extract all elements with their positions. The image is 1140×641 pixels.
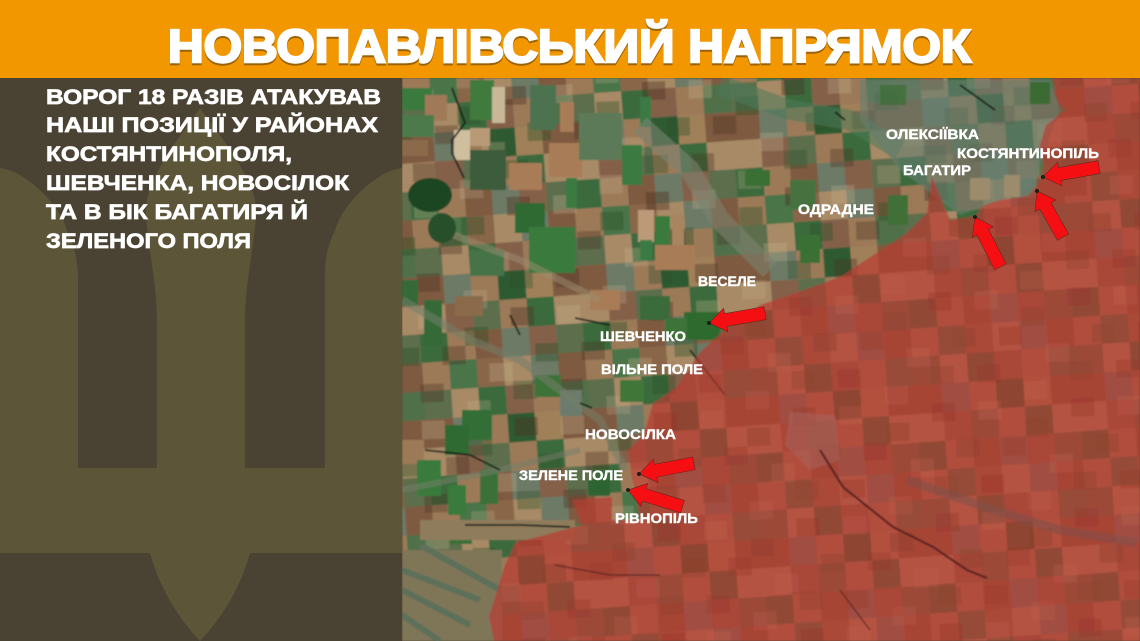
settlement labels: ШЕВЧЕНКО bbox=[600, 328, 686, 344]
map fields base bbox=[402, 78, 1140, 641]
arrow: Kostiantynopil east bbox=[1039, 155, 1101, 189]
settlement labels: ЗЕЛЕНЕ ПОЛЕ bbox=[519, 467, 623, 483]
settlement labels: НОВОСІЛКА bbox=[585, 426, 676, 442]
arrow: Bahatyr bbox=[963, 210, 1011, 272]
panel text: attack summary: ТА В БІК БАГАТИРЯ Й bbox=[46, 199, 308, 224]
trident left prong bbox=[0, 168, 78, 468]
arrow: Kostiantynopil south bbox=[1026, 183, 1074, 243]
trident right prong bbox=[325, 168, 402, 468]
creeks bbox=[425, 85, 995, 527]
panel text: attack summary: КОСТЯНТИНОПОЛЯ, bbox=[46, 142, 292, 166]
settlement labels: БАГАТИР bbox=[903, 162, 971, 178]
settlement labels: ОДРАДНЕ bbox=[798, 201, 874, 217]
panel text: attack summary: НАШІ ПОЗИЦІЇ У РАЙОНАХ bbox=[46, 112, 379, 137]
town and valleys inside red zone bbox=[555, 412, 1137, 630]
trident base band and point bbox=[0, 468, 402, 641]
panel text: attack summary: ВОРОГ 18 РАЗІВ АТАКУВАВ bbox=[46, 85, 381, 109]
map fields texture bbox=[402, 78, 1140, 641]
arrow: Shevchenko bbox=[705, 301, 767, 335]
settlement labels: КОСТЯНТИНОПІЛЬ bbox=[957, 145, 1099, 161]
trident centre prong bbox=[146, 108, 256, 468]
arrow: Zelene Pole bbox=[635, 452, 696, 486]
arrow: Rivnopil bbox=[623, 478, 686, 518]
trident emblem bbox=[0, 108, 402, 641]
settlement labels: ОЛЕКСІЇВКА bbox=[886, 126, 979, 142]
left panel background bbox=[0, 78, 402, 641]
header bar bbox=[0, 0, 1140, 78]
settlement labels bbox=[519, 126, 1099, 526]
settlement labels: РІВНОПІЛЬ bbox=[615, 510, 698, 526]
panel text: attack summary bbox=[46, 85, 381, 253]
red occupied zone bbox=[489, 78, 1140, 641]
panel text: attack summary: ЗЕЛЕНОГО ПОЛЯ bbox=[46, 229, 251, 253]
panel text: attack summary: ШЕВЧЕНКА, НОВОСІЛОК bbox=[46, 171, 350, 195]
satellite map bbox=[402, 78, 1140, 641]
settlement labels: ВЕСЕЛЕ bbox=[698, 273, 756, 289]
settlement labels: ВІЛЬНЕ ПОЛЕ bbox=[601, 361, 703, 377]
hand placed fields, forests and valleys bbox=[402, 80, 1060, 641]
title: НОВОПАВЛІВСЬКИЙ НАПРЯМОК bbox=[168, 20, 972, 72]
